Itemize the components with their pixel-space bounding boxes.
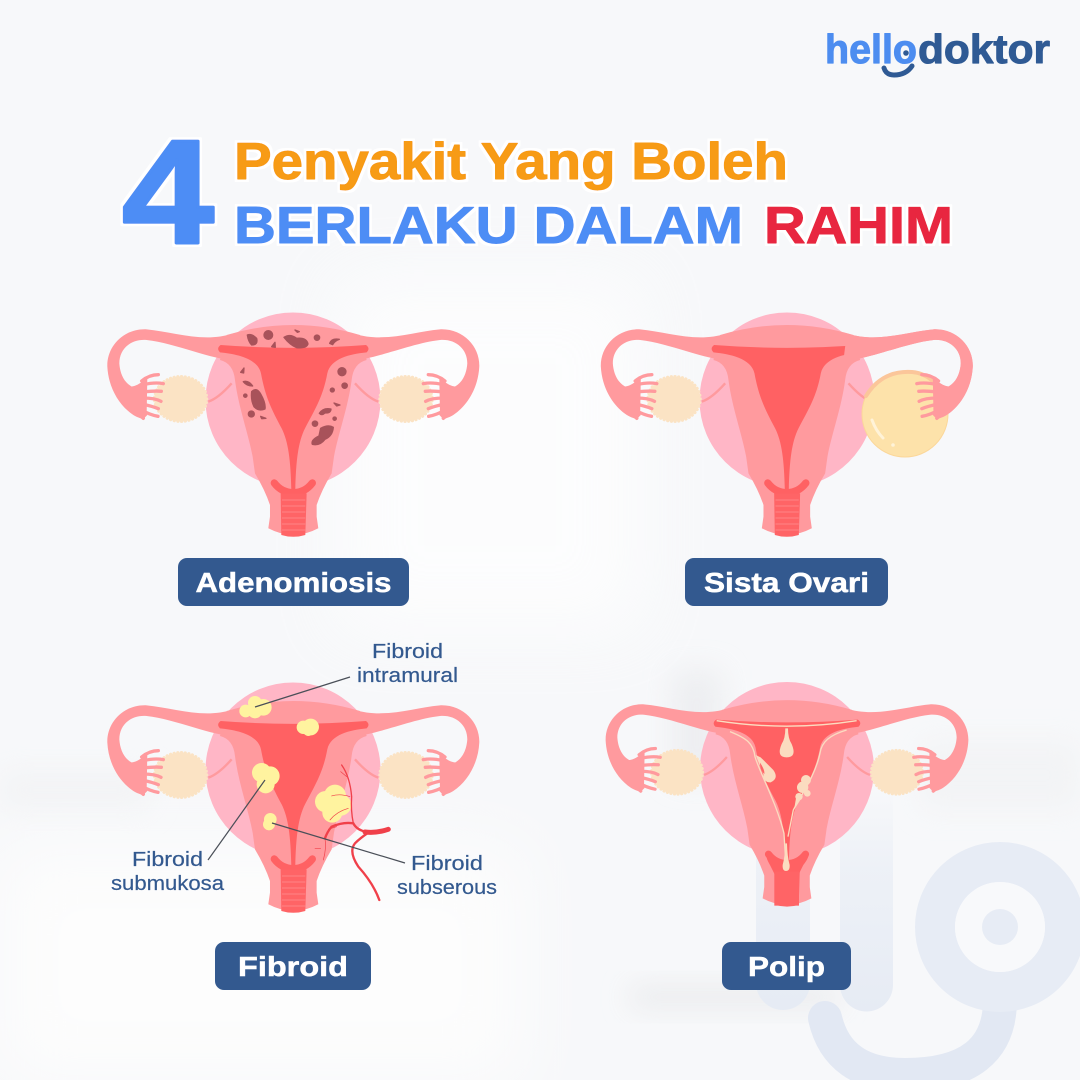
- logo: [825, 26, 1050, 75]
- label: Sista Ovari: Sista Ovari: [704, 567, 869, 598]
- label: Polip: Polip: [748, 951, 825, 982]
- polyps: [717, 721, 857, 906]
- panel: sista ovari: [601, 312, 973, 537]
- adenomiosis lesions: [241, 330, 347, 445]
- callout: Fibroid intramural: Fibroid: [372, 640, 443, 663]
- label: Sista Ovari: [685, 558, 888, 606]
- callout: Fibroid submukosa: submukosa: [111, 872, 225, 895]
- callout lines: [208, 677, 405, 863]
- title: [122, 110, 953, 275]
- callout: Fibroid intramural: intramural: [357, 664, 458, 687]
- title highlight: RAHIM: [764, 197, 953, 255]
- ovarian cyst: [843, 329, 973, 457]
- callout: Fibroid subserous: [397, 852, 497, 899]
- label: Polip: [722, 942, 851, 990]
- title line 1: Penyakit Yang Boleh: [234, 133, 788, 191]
- label: Adenomiosis: [178, 558, 409, 606]
- panel: polip: [606, 682, 968, 907]
- panel: adenomiosis: [107, 312, 479, 537]
- callout: Fibroid subserous: subserous: [397, 876, 497, 899]
- panel: fibroid: [107, 640, 497, 913]
- watermark logo: [756, 790, 1065, 1075]
- logo: doktor: [918, 26, 1050, 72]
- title line 2: BERLAKU DALAM: [234, 197, 743, 255]
- label: Fibroid: Fibroid: [238, 951, 348, 982]
- logo: hello: [825, 26, 917, 72]
- callout: Fibroid submukosa: Fibroid: [132, 848, 203, 871]
- label: Adenomiosis: Adenomiosis: [196, 567, 392, 598]
- label: Fibroid: [215, 942, 371, 990]
- title numeral: 4: [122, 110, 214, 275]
- fibroid growths: [239, 696, 351, 830]
- callout: Fibroid intramural: [357, 640, 458, 687]
- blood vessels: [315, 765, 388, 900]
- callout: Fibroid submukosa: [111, 848, 225, 895]
- callout: Fibroid subserous: Fibroid: [411, 852, 483, 875]
